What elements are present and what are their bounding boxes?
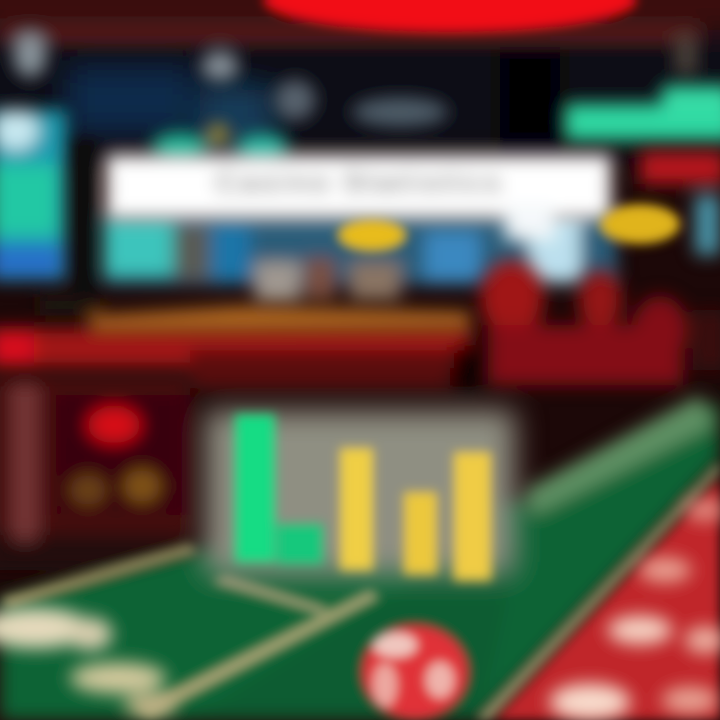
white table markings — [550, 499, 720, 720]
cream chips — [0, 608, 176, 717]
red sign right — [640, 152, 720, 255]
ceiling and back wall — [0, 0, 720, 155]
bar chart — [235, 414, 491, 580]
orange counter — [40, 295, 470, 332]
red craps table — [494, 478, 720, 720]
teal accents above panel — [152, 124, 288, 162]
icon: dice — [361, 624, 469, 720]
green sign top right — [565, 86, 720, 140]
yellow bars — [340, 448, 491, 580]
beige table lines — [0, 462, 720, 720]
green bars — [235, 414, 323, 564]
mid row of screens — [102, 215, 617, 302]
grey chart panel — [205, 410, 515, 575]
gold lamps — [338, 204, 680, 251]
green table right — [0, 395, 720, 720]
top red light — [264, 0, 636, 32]
lower-left cabinet — [0, 375, 190, 570]
left teal sign — [0, 110, 66, 280]
red chairs — [480, 260, 720, 385]
white title panel — [106, 155, 611, 240]
ceiling trim — [0, 24, 700, 126]
red band and floor wall — [0, 328, 476, 390]
blurred title text: Casino Statistics — [216, 166, 500, 199]
dark gap — [72, 140, 96, 300]
